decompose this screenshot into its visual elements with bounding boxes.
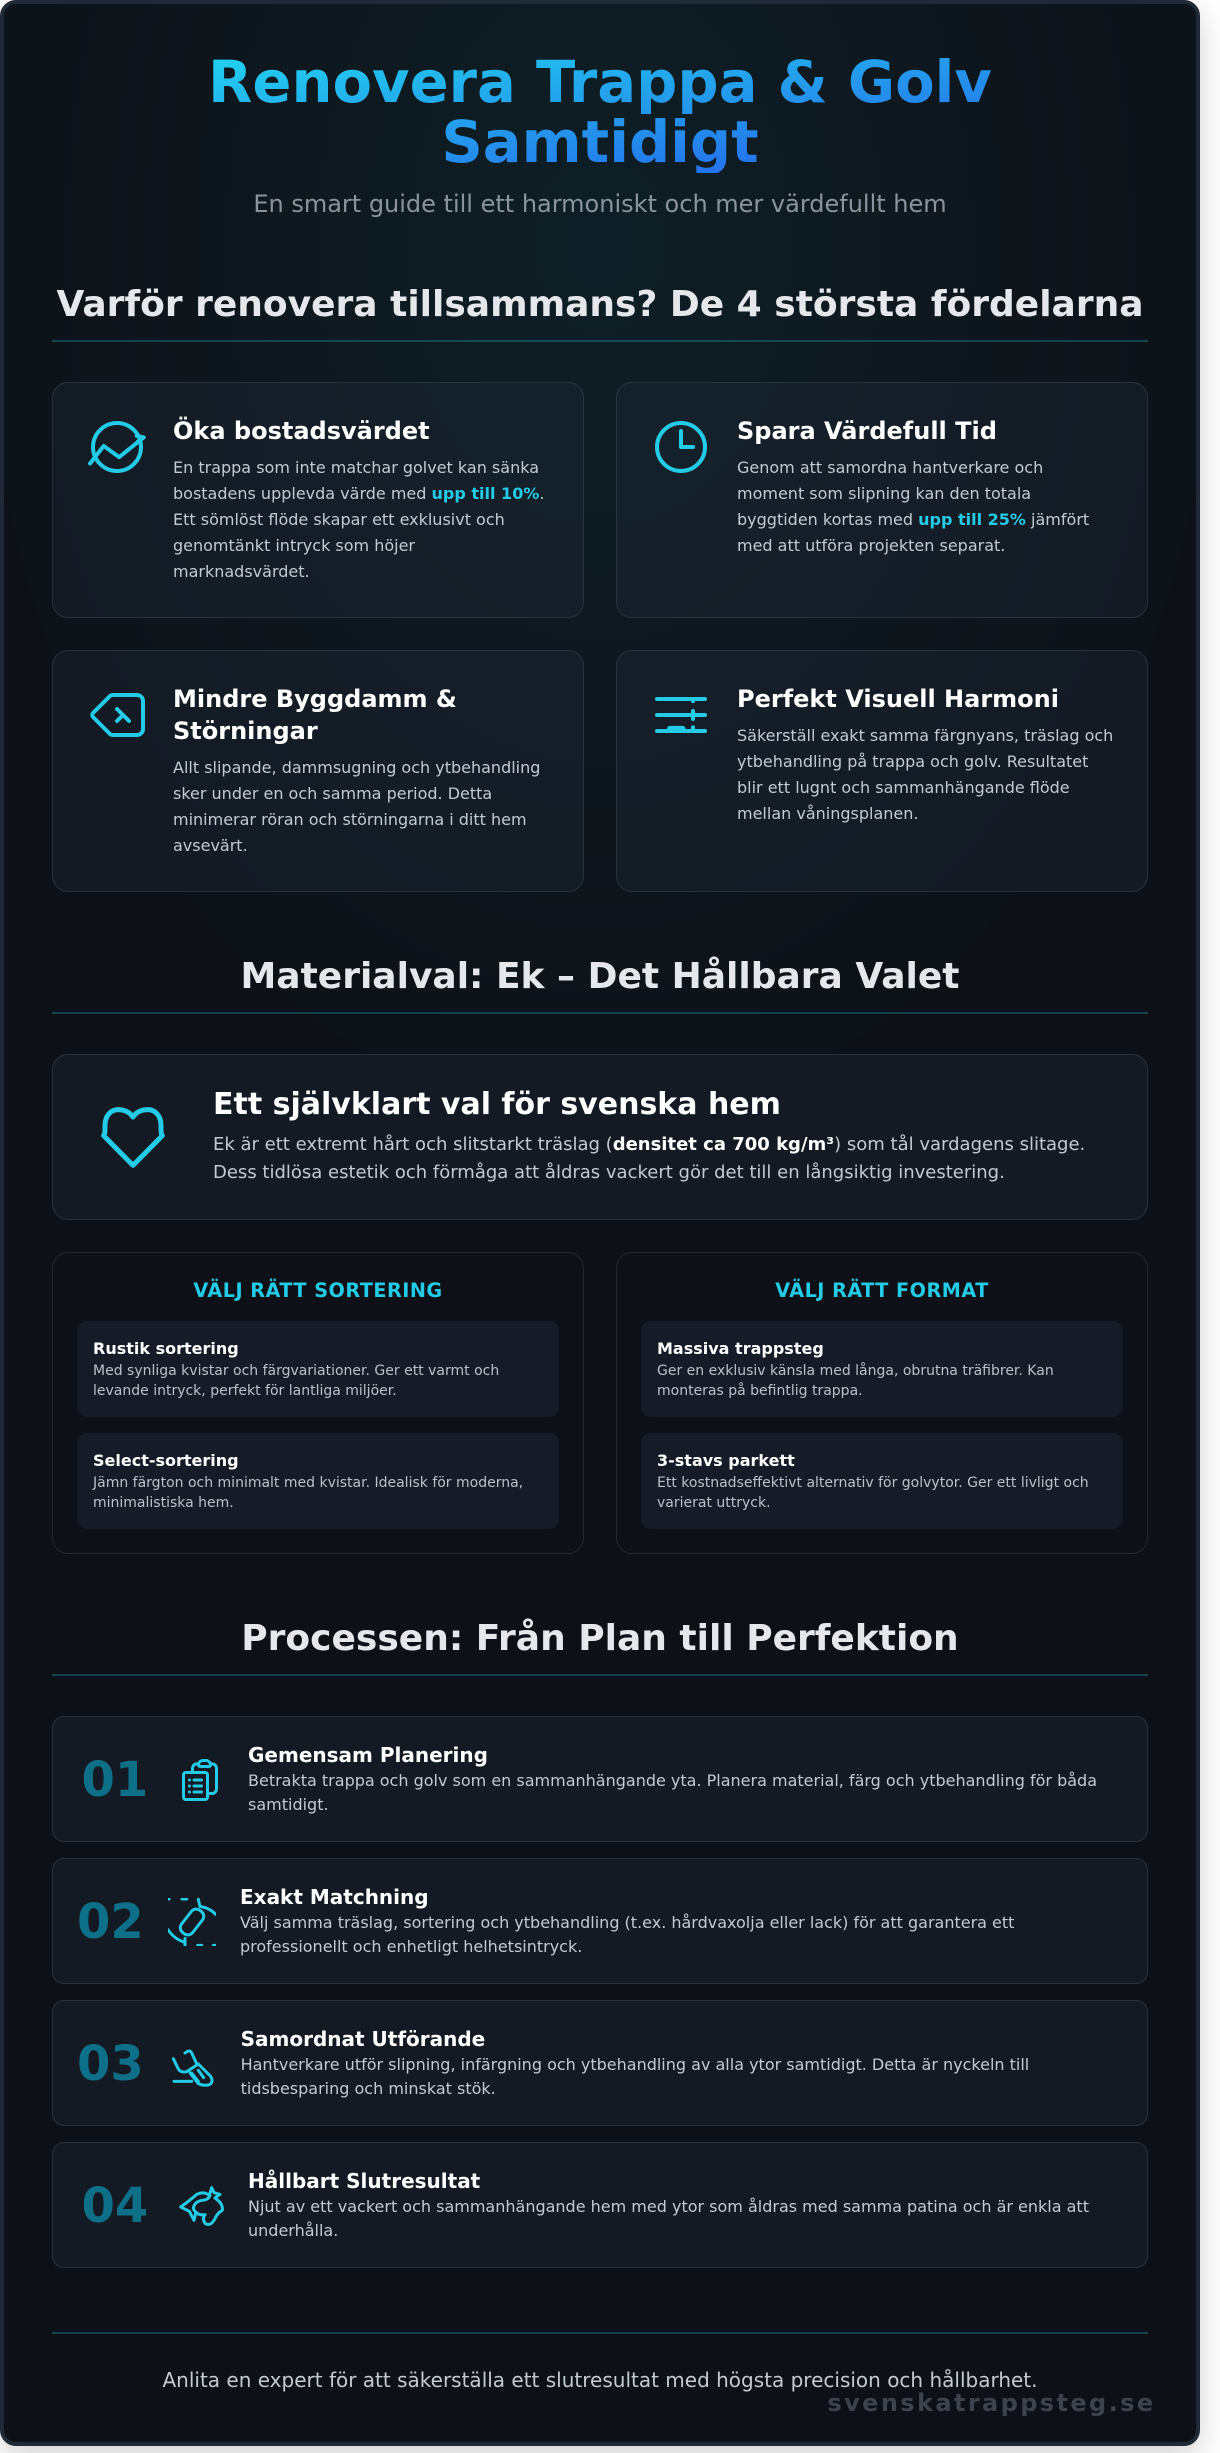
step 04: [52, 2142, 1148, 2268]
text: harmony: mellan våningsplanen.: [737, 804, 918, 823]
option: rustic: [77, 1321, 559, 1417]
text: increase value: marknadsvärdet.: [173, 562, 310, 581]
icon: matching link: [168, 1898, 216, 1946]
option: parquet: 3-stavs parkett: [657, 1451, 795, 1470]
text: step 3: [241, 2054, 1029, 2098]
footer text: Anlita en expert för att säkerställa ett slutresultat med högsta precision och hållbarhet.: [162, 2368, 1038, 2392]
text: step 3: Hantverkare utför slipning, infärgning och ytbehandling av alla ytor samtidigt. Detta är nyckeln till: [241, 2054, 1029, 2074]
heading: step 1: Gemensam Planering: [248, 1743, 488, 1767]
text: step 2: [240, 1912, 1014, 1956]
option: solid steps: monteras på befintlig trappa.: [657, 1383, 863, 1399]
text: less dust: Allt slipande, dammsugning och ytbehandling: [173, 758, 540, 777]
icon: tools: [172, 2050, 214, 2087]
heading: less dust: Störningar: [173, 717, 318, 745]
heading: less dust: Mindre Byggdamm &: [173, 685, 457, 713]
option: rustic: levande intryck, perfekt för lantliga miljöer.: [93, 1383, 397, 1399]
option: rustic: Rustik sortering: [93, 1339, 239, 1358]
option: rustic: Med synliga kvistar och färgvariationer. Ger ett varmt och: [93, 1363, 499, 1379]
text: increase value: Ett sömlöst flöde skapar ett exklusivt och: [173, 510, 505, 529]
text: step 4: underhålla.: [248, 2221, 338, 2240]
heading: benefits: Varför renovera tillsammans? De 4 största fördelarna: [56, 284, 1144, 325]
text: increase value: En trappa som inte matchar golvet kan sänka: [173, 458, 539, 477]
text: step 2: Välj samma träslag, sortering och ytbehandling (t.ex. hårdvaxolja eller lack) för att garantera ett: [240, 1912, 1014, 1932]
text: step 1: Betrakta trappa och golv som en sammanhängande yta. Planera material, färg och ytbehandling för båda: [248, 1770, 1097, 1790]
heading: oak: Ett självklart val för svenska hem: [213, 1087, 781, 1122]
option: solid steps: Massiva trappsteg: [657, 1339, 824, 1358]
heading: less dust: [173, 685, 457, 745]
option: select: Select-sortering: [93, 1451, 239, 1470]
heading: material: Materialval: Ek – Det Hållbara Valet: [240, 956, 960, 996]
text: harmony: Säkerställ exakt samma färgnyans, träslag och: [737, 726, 1113, 745]
text: step 4: Njut av ett vackert och sammanhängande hem med ytor som åldras med samma patina och är enkla att: [248, 2196, 1089, 2216]
title: [52, 52, 1148, 172]
text: step 2: professionellt och enhetligt helhetsintryck.: [240, 1937, 582, 1956]
watermark: svenskatrappsteg.se: [827, 2389, 1156, 2417]
option: parquet: varierat uttryck.: [657, 1495, 771, 1511]
step number 04: 04: [82, 2178, 148, 2234]
panel: benefit less dust: [52, 650, 584, 892]
text: save time: Genom att samordna hantverkare och: [737, 458, 1043, 477]
heading: grading: VÄLJ RÄTT SORTERING: [193, 1279, 443, 1302]
text: oak: Dess tidlösa estetik och förmåga att åldras vackert gör det till en långsiktig investering.: [213, 1162, 1005, 1183]
option: parquet: [641, 1433, 1123, 1529]
option: solid steps: [641, 1321, 1123, 1417]
icon: leaf shape: [179, 2186, 224, 2226]
text: step 3: tidsbesparing och minskat stök.: [241, 2079, 496, 2098]
subtitle: En smart guide till ett harmoniskt och mer värdefullt hem: [253, 190, 947, 218]
heading: step 2: Exakt Matchning: [240, 1885, 429, 1909]
text: increase value: [173, 458, 544, 581]
text: less dust: sker under en och samma period. Detta: [173, 784, 492, 803]
step 02: [52, 1858, 1148, 1984]
panel: choose format: [616, 1252, 1148, 1554]
text: less dust: avsevärt.: [173, 836, 248, 855]
step number 03: 03: [77, 2036, 144, 2092]
text: less dust: [173, 758, 540, 855]
heading: increase value: Öka bostadsvärdet: [173, 417, 430, 445]
text: increase value: bostadens upplevda värde med upp till 10%.: [173, 484, 544, 503]
step 01: [52, 1716, 1148, 1842]
text: save time: med att utföra projekten separat.: [737, 536, 1005, 555]
icon: chart in circle: [88, 421, 146, 473]
option: select: [77, 1433, 559, 1529]
text: save time: moment som slipning kan den totala: [737, 484, 1031, 503]
panel: benefit visual harmony: [616, 650, 1148, 892]
heading: process: Processen: Från Plan till Perfektion: [241, 1618, 959, 1658]
heading: step 3: Samordnat Utförande: [241, 2027, 485, 2051]
text: harmony: [737, 726, 1113, 823]
heading: step 4: Hållbart Slutresultat: [248, 2169, 480, 2193]
text: save time: byggtiden kortas med upp till 25% jämfört: [737, 510, 1089, 529]
text: step 4: [248, 2196, 1089, 2240]
icon: tag: [90, 693, 145, 737]
text: less dust: minimerar röran och störningarna i ditt hem: [173, 810, 527, 829]
step 03: [52, 2000, 1148, 2126]
step number 02: 02: [77, 1894, 144, 1950]
text: increase value: genomtänkt intryck som höjer: [173, 536, 415, 555]
text: oak: [213, 1134, 1085, 1183]
option: solid steps: Ger en exklusiv känsla med långa, obrutna träfibrer. Kan: [657, 1363, 1054, 1379]
text: harmony: ytbehandling på trappa och golv. Resultatet: [737, 752, 1088, 771]
text: step 1: [248, 1770, 1097, 1814]
title: Samtidigt: [441, 108, 759, 176]
panel: choose grading: [52, 1252, 584, 1554]
step number 01: 01: [82, 1752, 148, 1808]
heading: harmony: Perfekt Visuell Harmoni: [737, 685, 1059, 713]
icon: sliders: [655, 697, 707, 733]
text: step 1: samtidigt.: [248, 1795, 329, 1814]
panel: benefit save time: [616, 382, 1148, 618]
heading: format: VÄLJ RÄTT FORMAT: [775, 1279, 989, 1302]
panel: oak material: [52, 1054, 1148, 1220]
text: harmony: blir ett lugnt och sammanhängande flöde: [737, 778, 1070, 797]
option: select: Jämn färgton och minimalt med kvistar. Idealisk för moderna,: [93, 1475, 523, 1491]
icon: clock: [655, 421, 707, 473]
option: parquet: Ett kostnadseffektivt alternativ för golvytor. Ger ett livligt och: [657, 1475, 1089, 1491]
icon: heart: [101, 1107, 165, 1168]
title: Renovera Trappa & Golv: [208, 48, 992, 116]
heading: save time: Spara Värdefull Tid: [737, 417, 997, 445]
option: select: minimalistiska hem.: [93, 1495, 234, 1511]
text: oak: Ek är ett extremt hårt och slitstarkt träslag (densitet ca 700 kg/m³) som tål vardagens slitage.: [213, 1134, 1085, 1155]
icon: clipboard: [182, 1759, 218, 1801]
panel: benefit increase value: [52, 382, 584, 618]
text: save time: [737, 458, 1089, 555]
